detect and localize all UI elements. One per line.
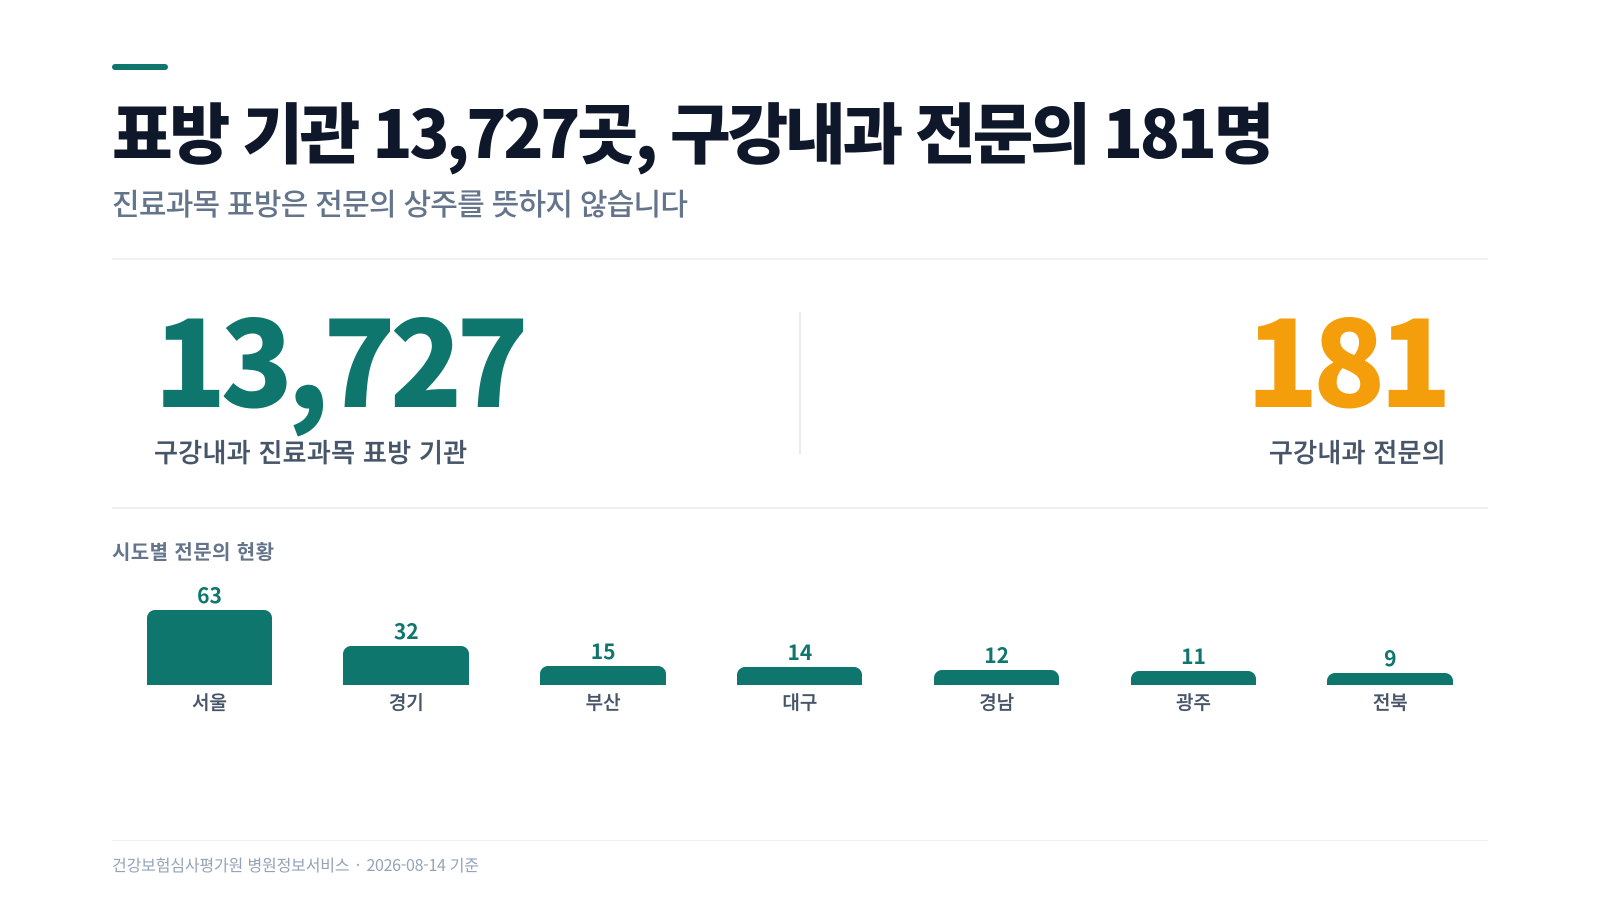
title: 표방 기관 13,727곳, 구강내과 전문의 181명: [112, 82, 1271, 178]
panel: stat right: [1246, 270, 1446, 470]
bar: 경기: 32: [394, 616, 419, 646]
bar: 경남: 경남: [979, 688, 1014, 714]
bar: 광주: 11: [1181, 641, 1206, 671]
bar: 부산: 15: [591, 636, 615, 666]
bar: 대구: 14: [788, 637, 812, 667]
accent bar: [112, 64, 168, 70]
bar: 광주: 광주: [1176, 688, 1211, 714]
bar: 경남: 12: [984, 640, 1009, 670]
big number: facilities: 13,727: [154, 270, 523, 442]
panel: stat left: [154, 270, 524, 470]
stat label: specialists: 구강내과 전문의: [1269, 433, 1446, 470]
bar chart: [147, 580, 1453, 714]
bar: 전북: 전북: [1373, 688, 1408, 714]
bar: 전북: 9: [1384, 643, 1396, 673]
bar: 경기: 경기: [389, 688, 424, 714]
footer source: 건강보험심사평가원 병원정보서비스 · 2026-08-14 기준: [112, 852, 479, 876]
section heading: 시도별 전문의 현황: [112, 536, 274, 565]
bar: 경남: [934, 640, 1059, 714]
stat label: facilities: 구강내과 진료과목 표방 기관: [154, 433, 467, 470]
bar: 부산: [540, 636, 666, 714]
bar: 경기: [343, 616, 469, 714]
bar: 대구: 대구: [782, 688, 817, 714]
bar: 부산: 부산: [586, 688, 621, 714]
bar: 전북: [1327, 643, 1453, 714]
big number: specialists: 181: [1246, 270, 1446, 442]
bar: 서울: [147, 580, 272, 714]
bar: 대구: [737, 637, 862, 714]
subtitle: 진료과목 표방은 전문의 상주를 뜻하지 않습니다: [112, 180, 687, 224]
bar: 서울: 63: [197, 580, 222, 610]
bar: 서울: 서울: [192, 688, 227, 714]
bar: 광주: [1131, 641, 1256, 714]
